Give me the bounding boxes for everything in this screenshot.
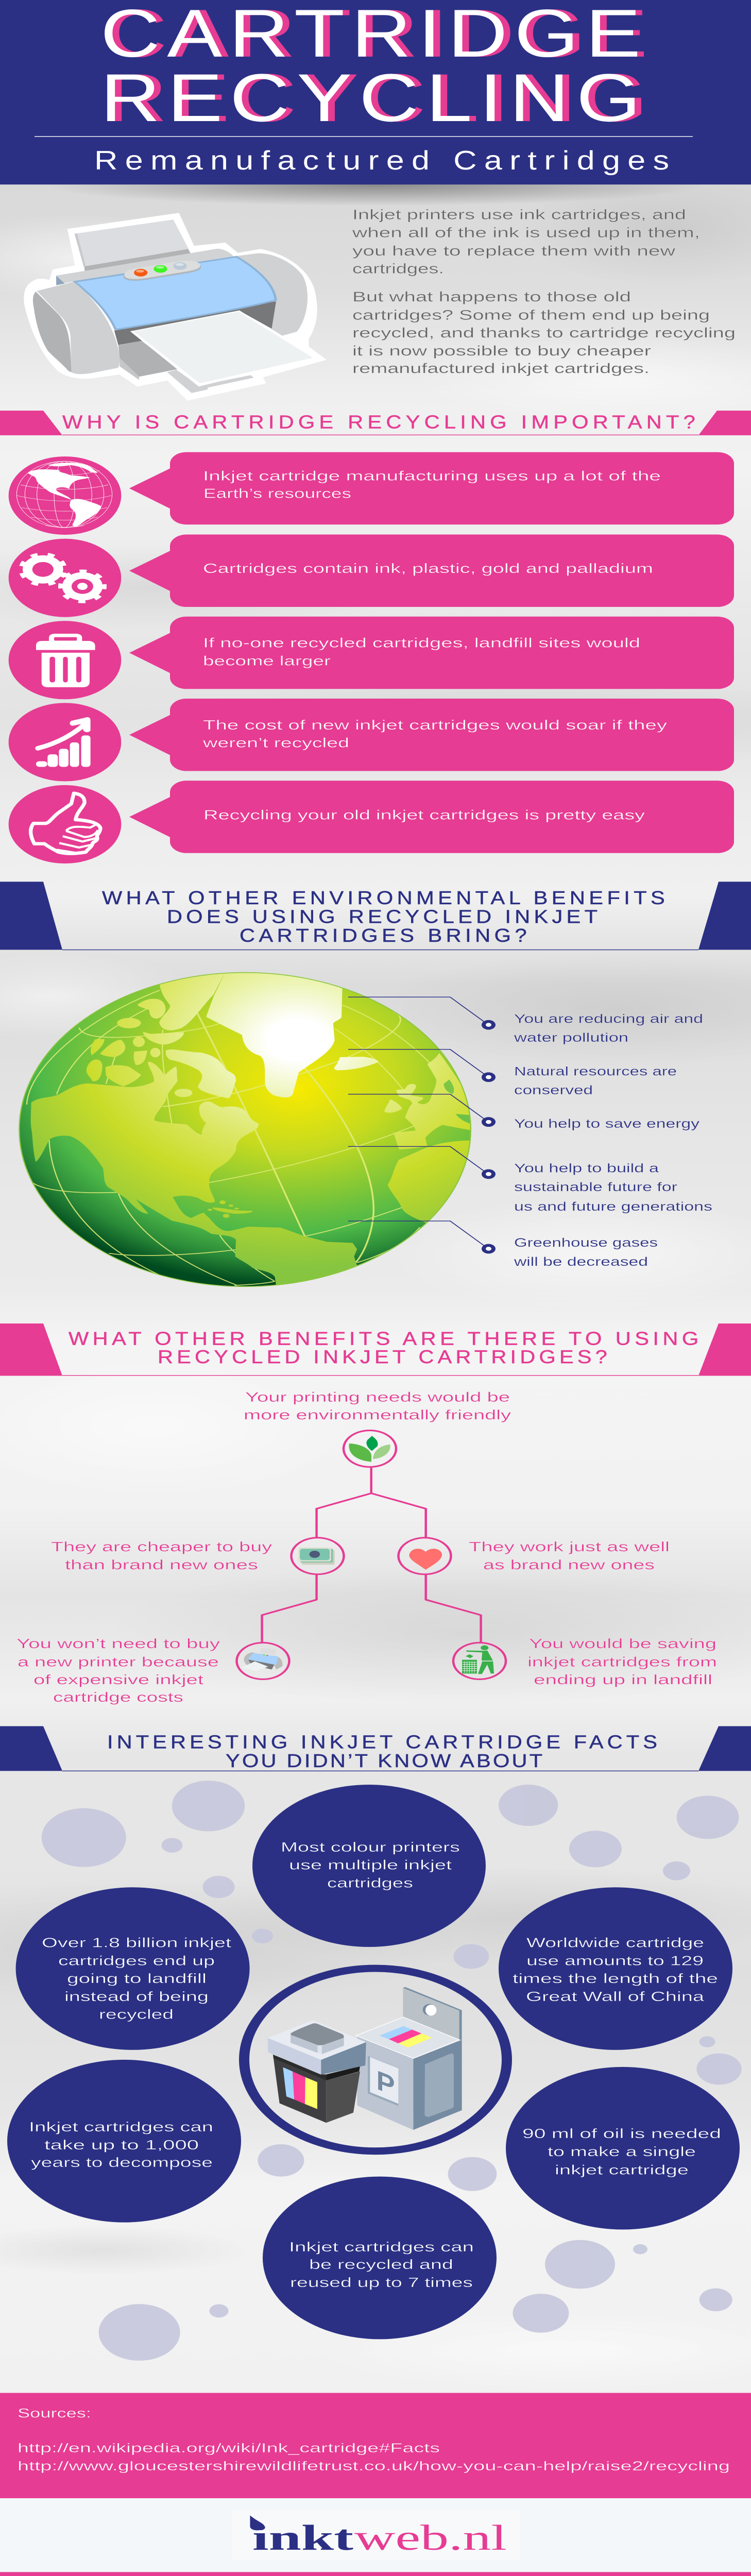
fact: multiple cartridges: cartridges bbox=[327, 1875, 413, 1890]
icon: thumbs up bbox=[9, 785, 121, 863]
fact: reused 7 times: be recycled and bbox=[309, 2257, 453, 2272]
fact: multiple cartridges bbox=[252, 1785, 486, 1947]
benefit tree connectors bbox=[262, 1467, 481, 1642]
icon: box and cartridge: P bbox=[377, 2064, 395, 2102]
bubble text bbox=[203, 635, 640, 668]
fact: reused 7 times: reused up to 7 times bbox=[290, 2275, 473, 2290]
speech bubble bbox=[129, 699, 734, 771]
fact: decomposition: Inkjet cartridges can bbox=[29, 2120, 213, 2134]
benefit: environmentally friendly bbox=[244, 1389, 511, 1467]
logo: inktweb.nl: inkt bbox=[252, 2518, 353, 2558]
intro text: remanufactured inkjet cartridges. bbox=[352, 361, 650, 376]
benefit 3: leader and text bbox=[348, 1094, 699, 1131]
benefit: works as well: as brand new ones bbox=[483, 1557, 655, 1572]
benefit 4: leader and text: You help to build a bbox=[514, 1161, 659, 1175]
speech bubble bbox=[129, 617, 734, 689]
benefit 1: leader and text bbox=[348, 997, 703, 1045]
fact: multiple cartridges: Most colour printers bbox=[281, 1839, 460, 1855]
footer bbox=[0, 2498, 751, 2576]
benefit: no new printer: a new printer because bbox=[18, 1654, 219, 1669]
fact: great wall: times the length of the bbox=[513, 1971, 718, 1986]
decorative bubbles bbox=[42, 1781, 742, 2361]
fact: reused 7 times: Inkjet cartridges can bbox=[289, 2240, 474, 2255]
reason 5 bbox=[9, 781, 734, 863]
fact: 90 ml oil: 90 ml of oil is needed bbox=[522, 2126, 721, 2141]
benefit: no new printer bbox=[16, 1636, 289, 1705]
section heading: interesting facts: INTERESTING INKJET CARTRIDGE FACTS bbox=[107, 1732, 657, 1753]
benefit: saving from landfill: inkjet cartridges from bbox=[527, 1654, 717, 1669]
benefit: environmentally friendly: Your printing needs would be bbox=[245, 1389, 510, 1404]
fact: 1.8 billion bbox=[16, 1887, 250, 2050]
bubble text bbox=[202, 717, 667, 750]
fact: 1.8 billion: cartridges end up bbox=[58, 1953, 215, 1968]
benefit 2: leader and text: Natural resources are bbox=[514, 1065, 677, 1078]
fact: 1.8 billion: instead of being bbox=[64, 1989, 209, 2004]
icon: person using bin bbox=[462, 1646, 494, 1674]
benefit: cheaper: They are cheaper to buy bbox=[51, 1539, 272, 1554]
section heading: environmental benefits: DOES USING RECYCLED INKJET bbox=[167, 907, 598, 927]
benefit: cheaper: than brand new ones bbox=[65, 1557, 258, 1572]
icon: leaves bbox=[349, 1436, 390, 1462]
logo: inktweb.nl bbox=[250, 2515, 507, 2558]
fact: reused 7 times bbox=[263, 2177, 497, 2339]
reason 3 bbox=[9, 617, 734, 699]
fact: 1.8 billion: Over 1.8 billion inkjet bbox=[42, 1935, 231, 1950]
speech bubble bbox=[129, 452, 734, 524]
icon: world globe bbox=[9, 456, 121, 535]
bubble text: Recycling your old inkjet cartridges is pretty easy bbox=[203, 807, 645, 822]
intro text: recycled, and thanks to cartridge recycling bbox=[352, 325, 736, 341]
benefit: works as well: They work just as well bbox=[469, 1539, 670, 1554]
fact: great wall: Worldwide cartridge bbox=[526, 1935, 704, 1950]
icon: small printer bbox=[242, 1648, 282, 1671]
benefit: environmentally friendly: more environmentally friendly bbox=[244, 1408, 511, 1422]
illustration: printer bbox=[24, 213, 327, 401]
icon: trash can bbox=[9, 621, 121, 699]
section heading: other benefits bbox=[0, 1324, 751, 1376]
fact: decomposition: years to decompose bbox=[31, 2155, 213, 2170]
bubble text: Cartridges contain ink, plastic, gold and palladium bbox=[203, 561, 653, 576]
title bbox=[100, 0, 647, 136]
intro text: when all of the ink is used up in them, bbox=[352, 225, 700, 240]
bubble text bbox=[203, 468, 661, 501]
speech bubble bbox=[129, 535, 734, 607]
bubble text: Inkjet cartridge manufacturing uses up a lot of the bbox=[203, 468, 661, 483]
icon: gears bbox=[9, 539, 121, 617]
benefit 5: leader and text bbox=[348, 1221, 658, 1269]
title: RECYCLING bbox=[107, 60, 647, 136]
fact: 90 ml oil bbox=[506, 2067, 740, 2230]
benefit: no new printer: You won’t need to buy bbox=[16, 1636, 220, 1651]
speech bubble bbox=[129, 781, 734, 853]
icon: rising chart bbox=[9, 703, 121, 782]
intro text: cartridges. bbox=[352, 261, 444, 276]
fact: multiple cartridges: use multiple inkjet bbox=[289, 1857, 452, 1872]
section heading: environmental benefits: CARTRIDGES BRING? bbox=[240, 926, 527, 946]
fact: 90 ml oil: inkjet cartridge bbox=[555, 2162, 689, 2177]
section heading: interesting facts: YOU DIDN’T KNOW ABOUT bbox=[226, 1751, 542, 1771]
reason 1 bbox=[9, 452, 734, 535]
benefit 4: leader and text bbox=[348, 1146, 712, 1213]
benefit: no new printer: cartridge costs bbox=[53, 1690, 183, 1705]
benefit 4: leader and text: sustainable future for bbox=[514, 1180, 677, 1194]
intro text: it is now possible to buy cheaper bbox=[352, 343, 651, 358]
section heading: why is recycling important: WHY IS CARTRIDGE RECYCLING IMPORTANT? bbox=[62, 412, 695, 433]
benefit 2: leader and text bbox=[348, 1049, 677, 1097]
bubble text: Earth’s resources bbox=[203, 486, 351, 501]
benefit 2: leader and text: conserved bbox=[514, 1083, 593, 1097]
section heading: interesting facts bbox=[0, 1726, 751, 1771]
fact: great wall: use amounts to 129 bbox=[526, 1953, 704, 1968]
icon: banknotes bbox=[298, 1548, 335, 1565]
benefit: no new printer: of expensive inkjet bbox=[33, 1672, 203, 1687]
section heading: environmental benefits: WHAT OTHER ENVIRONMENTAL BENEFITS bbox=[102, 888, 665, 909]
sources panel: http://en.wikipedia.org/wiki/Ink_cartridge#Facts bbox=[18, 2441, 440, 2455]
fact: decomposition: take up to 1,000 bbox=[44, 2137, 199, 2152]
reason 2 bbox=[9, 535, 734, 617]
intro text: you have to replace them with new bbox=[352, 243, 675, 258]
sources panel: http://www.gloucestershirewildlifetrust.co.uk/how-you-can-help/raise2/recycling bbox=[18, 2459, 730, 2473]
illustration: green globe bbox=[19, 972, 472, 1287]
benefit 4: leader and text: us and future generations bbox=[514, 1200, 712, 1213]
logo: inktweb.nl: web.nl bbox=[354, 2518, 507, 2558]
bubble text: If no-one recycled cartridges, landfill sites would bbox=[203, 635, 640, 650]
benefit 1: leader and text: water pollution bbox=[514, 1031, 628, 1045]
bubble text: The cost of new inkjet cartridges would soar if they bbox=[203, 717, 667, 733]
title: RECYCLING bbox=[100, 60, 641, 136]
section heading: other benefits: RECYCLED INKJET CARTRIDGES? bbox=[158, 1347, 607, 1367]
intro text: But what happens to those old bbox=[352, 289, 631, 304]
intro text: cartridges? Some of them end up being bbox=[352, 307, 710, 323]
illustration: cartridges in ring bbox=[244, 1969, 507, 2151]
intro text: Inkjet printers use ink cartridges, and bbox=[352, 207, 686, 222]
sources panel bbox=[0, 2393, 751, 2498]
bubble text: weren’t recycled bbox=[202, 735, 349, 750]
section heading: environmental benefits bbox=[0, 882, 751, 950]
bubble text: become larger bbox=[203, 653, 331, 668]
header banner bbox=[0, 0, 751, 184]
benefit 3: leader and text: You help to save energy bbox=[514, 1117, 699, 1131]
benefit: saving from landfill: ending up in landfill bbox=[534, 1672, 712, 1687]
benefit 1: leader and text: You are reducing air and bbox=[514, 1012, 703, 1026]
benefit 5: leader and text: will be decreased bbox=[514, 1255, 648, 1269]
fact: 1.8 billion: going to landfill bbox=[67, 1971, 207, 1986]
fact: 90 ml oil: to make a single bbox=[548, 2144, 696, 2159]
icon: heart bbox=[409, 1549, 442, 1570]
fact: great wall bbox=[499, 1887, 732, 2050]
fact: great wall: Great Wall of China bbox=[526, 1989, 704, 2004]
benefit: saving from landfill: You would be saving bbox=[529, 1636, 716, 1651]
icon: box and cartridge bbox=[268, 1987, 462, 2130]
sources panel: Sources: bbox=[18, 2406, 91, 2420]
intro text bbox=[352, 207, 736, 376]
benefit: saving from landfill bbox=[453, 1636, 717, 1687]
reason 4 bbox=[9, 699, 734, 782]
section heading: other benefits: WHAT OTHER BENEFITS ARE THERE TO USING bbox=[69, 1329, 698, 1349]
benefit 5: leader and text: Greenhouse gases bbox=[514, 1236, 658, 1250]
benefit: works as well bbox=[399, 1538, 670, 1574]
subtitle: Remanufactured Cartridges bbox=[94, 146, 669, 176]
fact: decomposition bbox=[7, 2060, 241, 2223]
benefit: cheaper bbox=[51, 1538, 344, 1574]
fact: 1.8 billion: recycled bbox=[99, 2007, 174, 2022]
